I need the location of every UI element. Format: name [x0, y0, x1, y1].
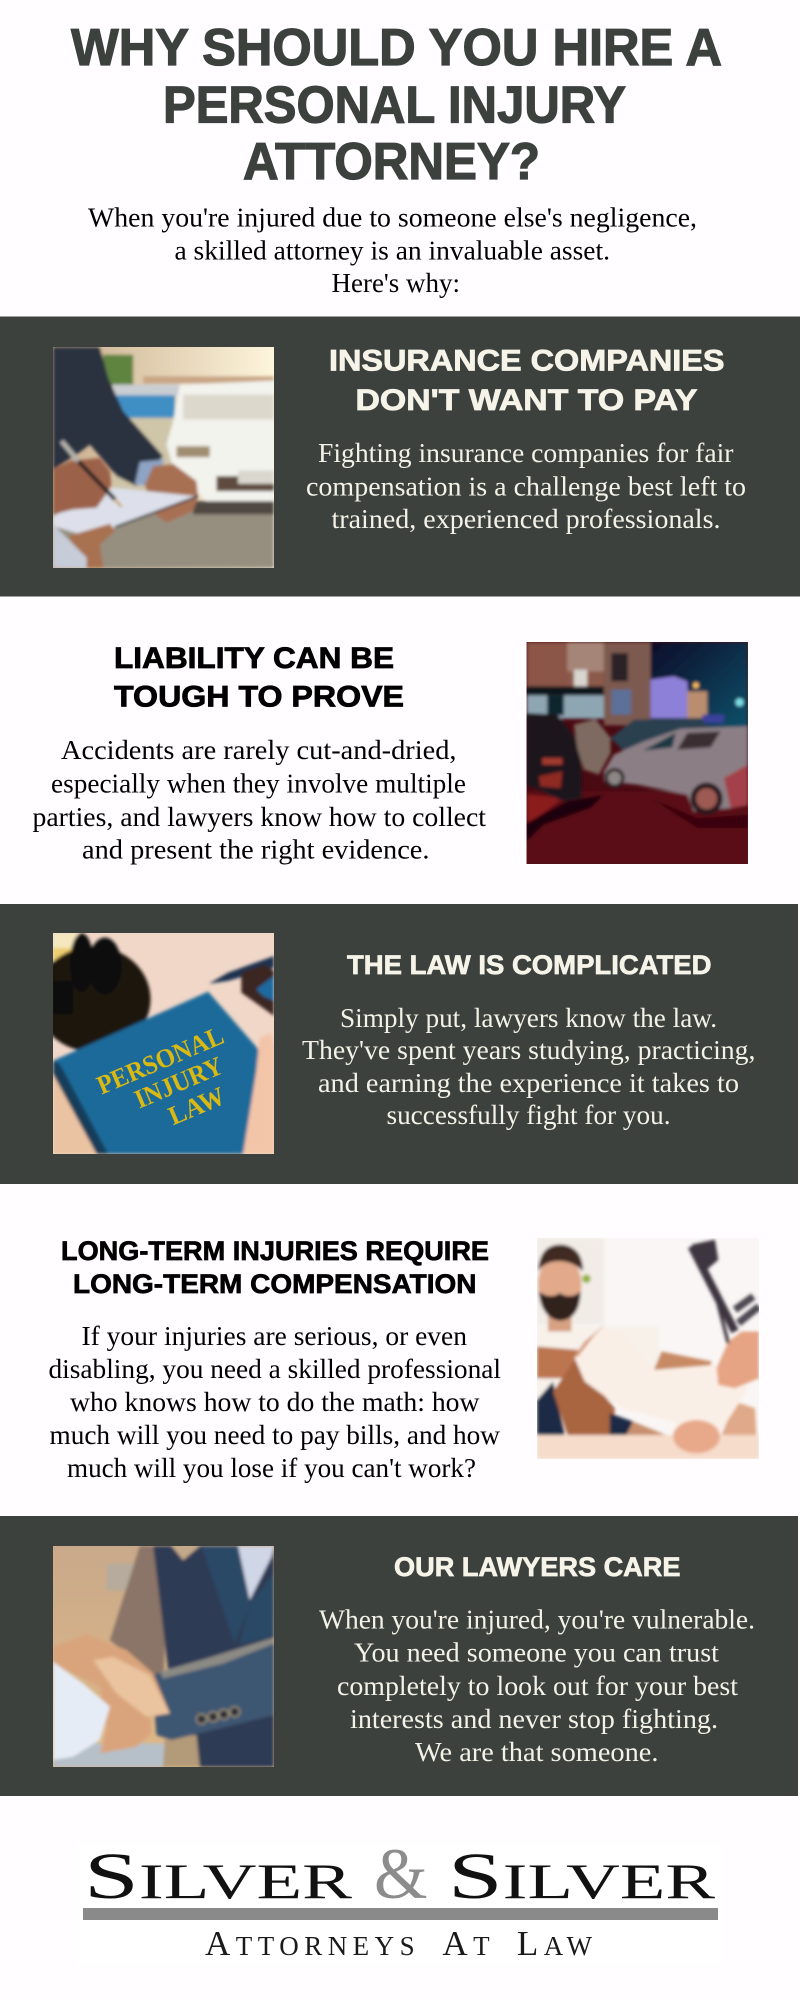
logo: Silver & Silver	[76, 1834, 722, 1965]
title: PERSONAL INJURY	[163, 76, 626, 134]
intro text: Here's why:	[332, 268, 460, 298]
photo: man with leg cast and crutches	[537, 1238, 759, 1459]
intro text: a skilled attorney is an invaluable asset.	[174, 236, 610, 266]
ampersand: &	[374, 1834, 428, 1914]
heading: LONG-TERM COMPENSATION	[73, 1269, 476, 1299]
book cover lettering	[92, 1020, 229, 1131]
photo: handshake	[53, 1546, 274, 1767]
photo: personal injury law book with gavel	[53, 933, 274, 1154]
body text: who knows how to do the math: how	[70, 1387, 480, 1417]
title: ATTORNEY?	[243, 133, 540, 191]
panel: the law is complicated	[0, 904, 798, 1184]
body text: Accidents are rarely cut-and-dried,	[61, 735, 456, 765]
body text	[319, 1605, 755, 1767]
body text: interests and never stop fighting.	[350, 1704, 718, 1734]
body text: completely to look out for your best	[337, 1671, 739, 1701]
panel: our lawyers care	[0, 1516, 798, 1796]
book cover lettering: LAW	[164, 1080, 229, 1131]
body text: They've spent years studying, practicing,	[302, 1035, 756, 1065]
body text	[32, 735, 487, 865]
panel: insurance companies	[0, 316, 800, 596]
body text: and earning the experience it takes to	[318, 1068, 739, 1098]
heading: TOUGH TO PROVE	[114, 680, 404, 714]
logo name right: S ILVER	[448, 1840, 716, 1913]
heading: DON'T WANT TO PAY	[356, 384, 698, 417]
photo: signing a claim in front of a white car	[53, 347, 274, 568]
heading: LIABILITY CAN BE	[114, 642, 394, 675]
body text: much will you need to pay bills, and how	[50, 1420, 501, 1450]
body text	[306, 438, 746, 534]
heading: THE LAW IS COMPLICATED	[347, 950, 712, 980]
heading: LONG-TERM INJURIES REQUIRE	[61, 1236, 489, 1266]
body text: especially when they involve multiple	[51, 768, 466, 798]
panel background	[0, 316, 800, 596]
logo name left: S ILVER	[84, 1840, 353, 1913]
book cover lettering: PERSONAL	[92, 1020, 228, 1100]
heading	[114, 642, 404, 714]
body text	[48, 1321, 501, 1483]
body text: disabling, you need a skilled professional	[48, 1354, 501, 1384]
body text: If your injuries are serious, or even	[82, 1321, 468, 1351]
heading	[61, 1236, 489, 1299]
body text: When you're injured, you're vulnerable.	[319, 1605, 755, 1635]
body text: parties, and lawyers know how to collect	[32, 802, 487, 832]
panel: liability	[32, 642, 748, 865]
logo background	[76, 1843, 722, 1965]
body text: compensation is a challenge best left to	[306, 472, 746, 502]
heading	[329, 344, 724, 417]
panel: long-term injuries	[48, 1236, 759, 1483]
body text: and present the right evidence.	[82, 835, 430, 865]
body text: successfully fight for you.	[386, 1100, 670, 1130]
photo: night car crash	[526, 642, 748, 864]
title: WHY SHOULD YOU HIRE A	[71, 19, 722, 77]
heading: INSURANCE COMPANIES	[329, 344, 724, 378]
body text: We are that someone.	[415, 1737, 658, 1767]
body text: You need someone you can trust	[354, 1638, 720, 1668]
intro text: When you're injured due to someone else's negligence,	[88, 202, 697, 232]
title	[71, 19, 722, 191]
body text: much will you lose if you can't work?	[67, 1453, 476, 1483]
intro text	[88, 202, 697, 298]
book cover lettering: INJURY	[130, 1050, 227, 1114]
body text: trained, experienced professionals.	[332, 504, 720, 534]
heading: OUR LAWYERS CARE	[394, 1552, 680, 1582]
logo bar	[83, 1908, 718, 1920]
panel background	[0, 904, 798, 1184]
body text	[302, 1003, 756, 1130]
panel background	[0, 1516, 798, 1796]
body text: Simply put, lawyers know the law.	[340, 1003, 717, 1033]
body text: Fighting insurance companies for fair	[318, 438, 734, 468]
logo tagline: ATTORNEYS AT LAW	[205, 1924, 593, 1963]
